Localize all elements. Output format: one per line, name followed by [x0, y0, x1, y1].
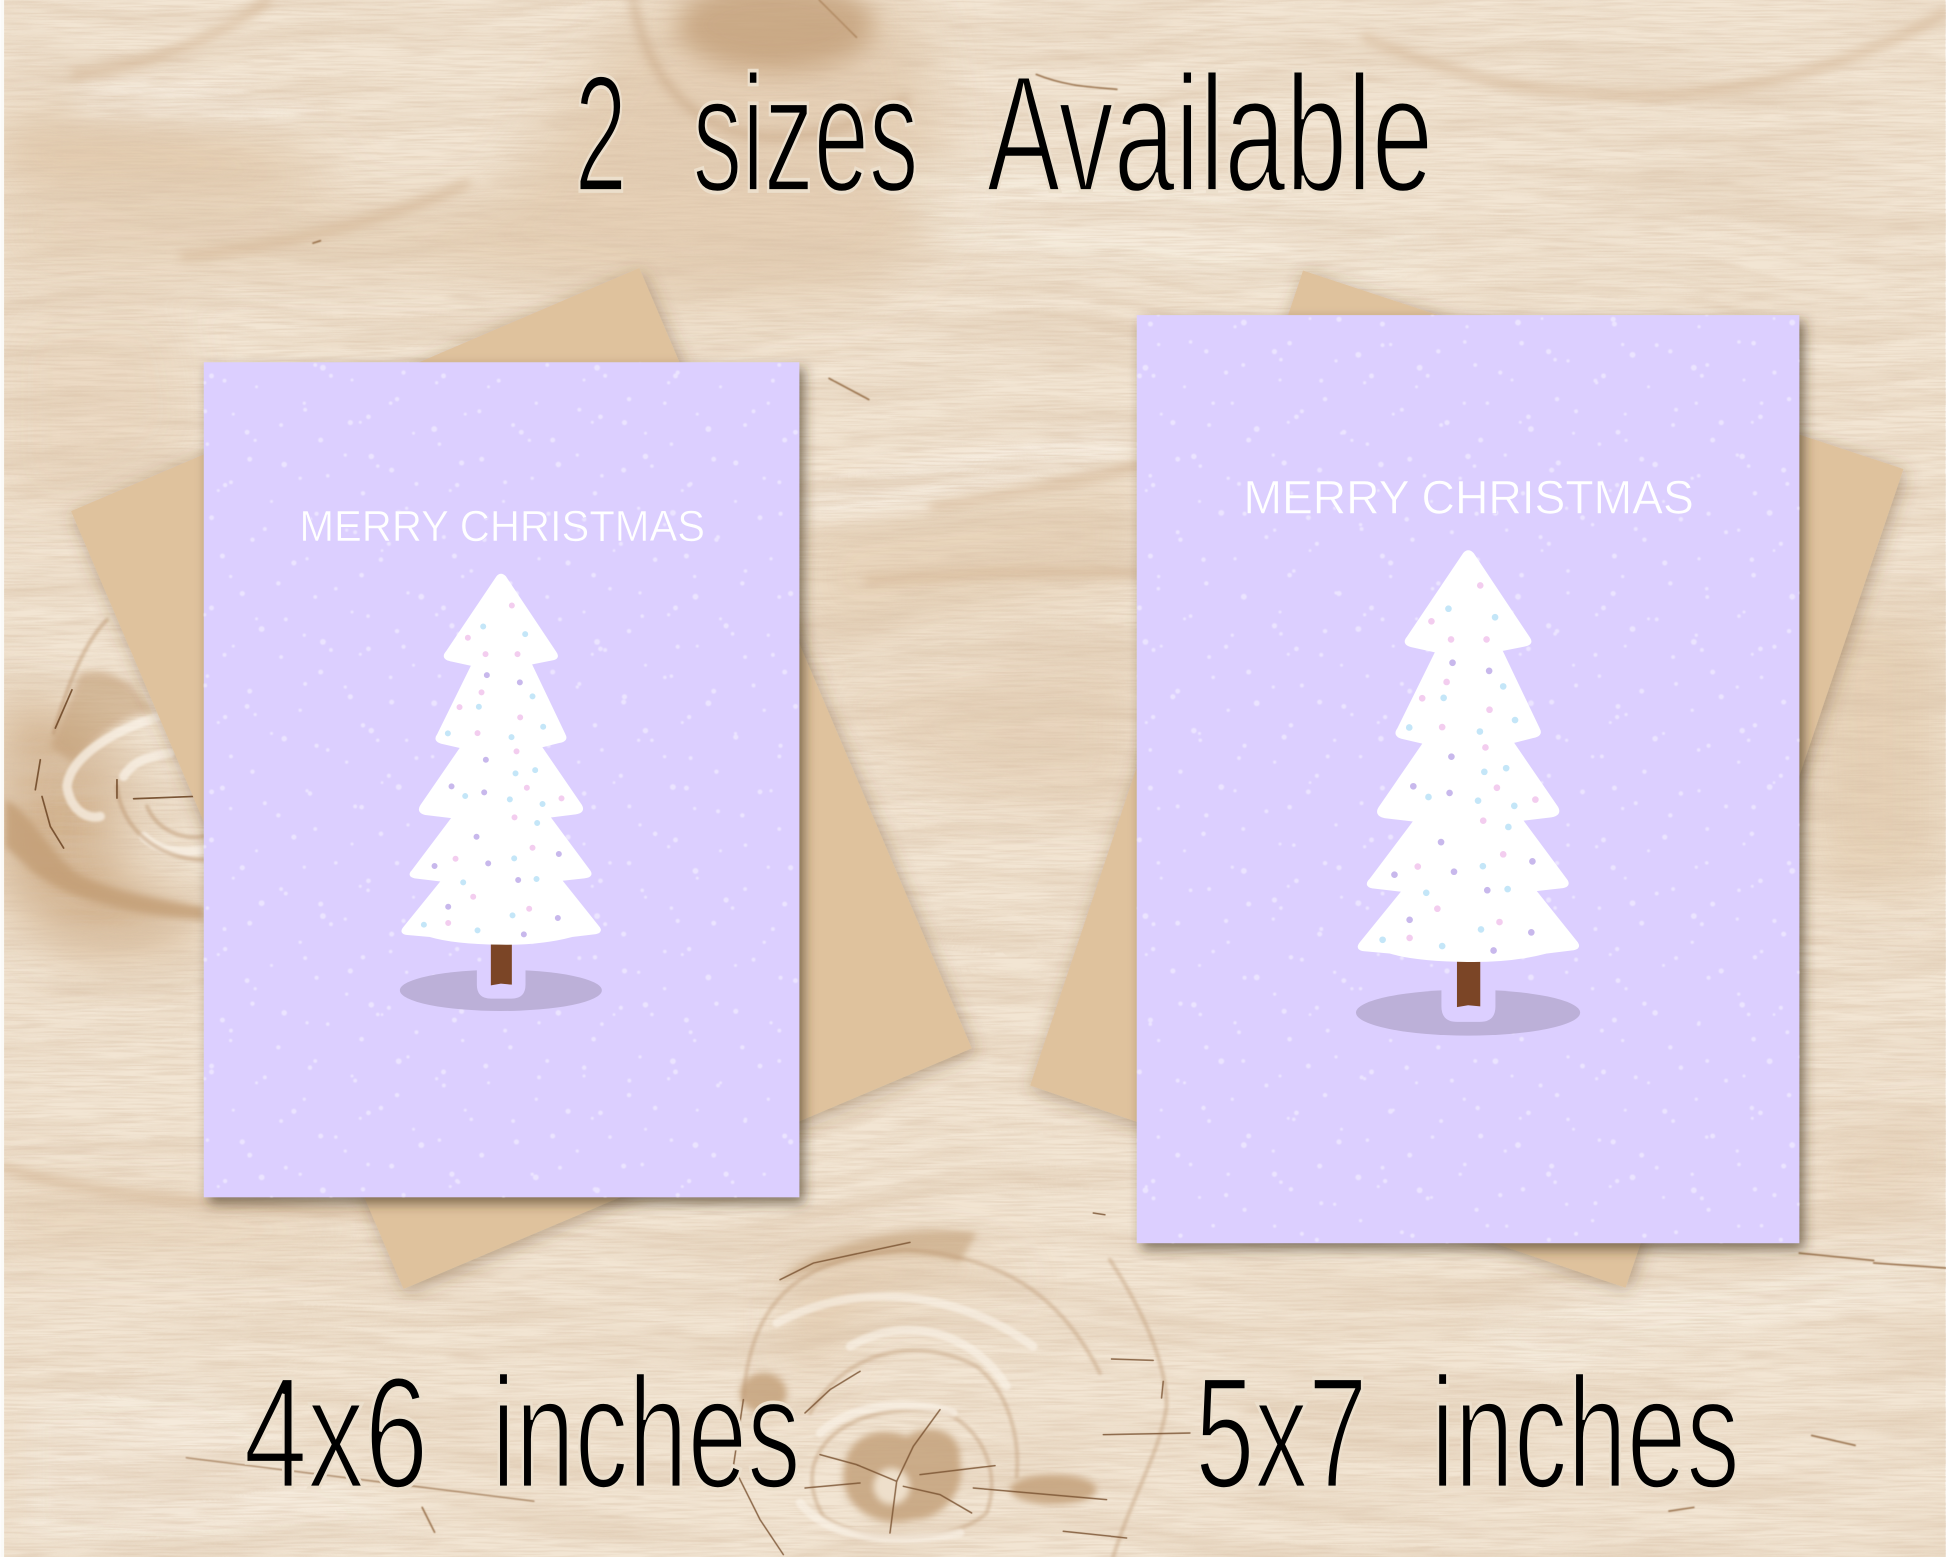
envelope: large card	[1030, 270, 1903, 1288]
trunk base cutout	[477, 963, 526, 999]
card face	[1137, 315, 1799, 1243]
left knot	[5, 620, 204, 920]
pink ornaments	[448, 605, 562, 923]
card: 4x6	[204, 362, 799, 1197]
tree shadow	[400, 970, 602, 1011]
purple ornaments	[435, 675, 559, 934]
size label: 5x7 inches	[1195, 1344, 1740, 1522]
tree illustration	[1356, 552, 1580, 1036]
upper wood bands	[0, 0, 1946, 1228]
title: sizes	[693, 42, 918, 227]
card snow speckle	[204, 362, 799, 1197]
tree trunk	[491, 941, 512, 985]
top knot	[633, 0, 906, 137]
size label: 4x6 inches	[244, 1344, 801, 1522]
card greeting: MERRY CHRISTMAS	[299, 503, 705, 551]
size label: 5x7 inches: 5x7	[1195, 1344, 1368, 1522]
tree foliage	[403, 575, 600, 943]
title: 2	[575, 42, 627, 227]
card face	[204, 362, 799, 1197]
card greeting: MERRY CHRISTMAS	[1243, 471, 1694, 524]
title	[575, 42, 1433, 227]
size label: 4x6 inches: inches	[492, 1344, 801, 1522]
card snow speckle	[1137, 315, 1799, 1243]
envelope: small card	[71, 268, 972, 1289]
size label: 5x7 inches: inches	[1431, 1344, 1740, 1522]
size label: 4x6 inches: 4x6	[244, 1344, 428, 1522]
card: 5x7	[1137, 315, 1799, 1243]
left margin strip	[0, 0, 4, 1557]
title: Available	[987, 42, 1433, 227]
tree illustration	[400, 575, 602, 1011]
blue ornaments	[424, 626, 543, 930]
bottom knot	[733, 1213, 1190, 1557]
